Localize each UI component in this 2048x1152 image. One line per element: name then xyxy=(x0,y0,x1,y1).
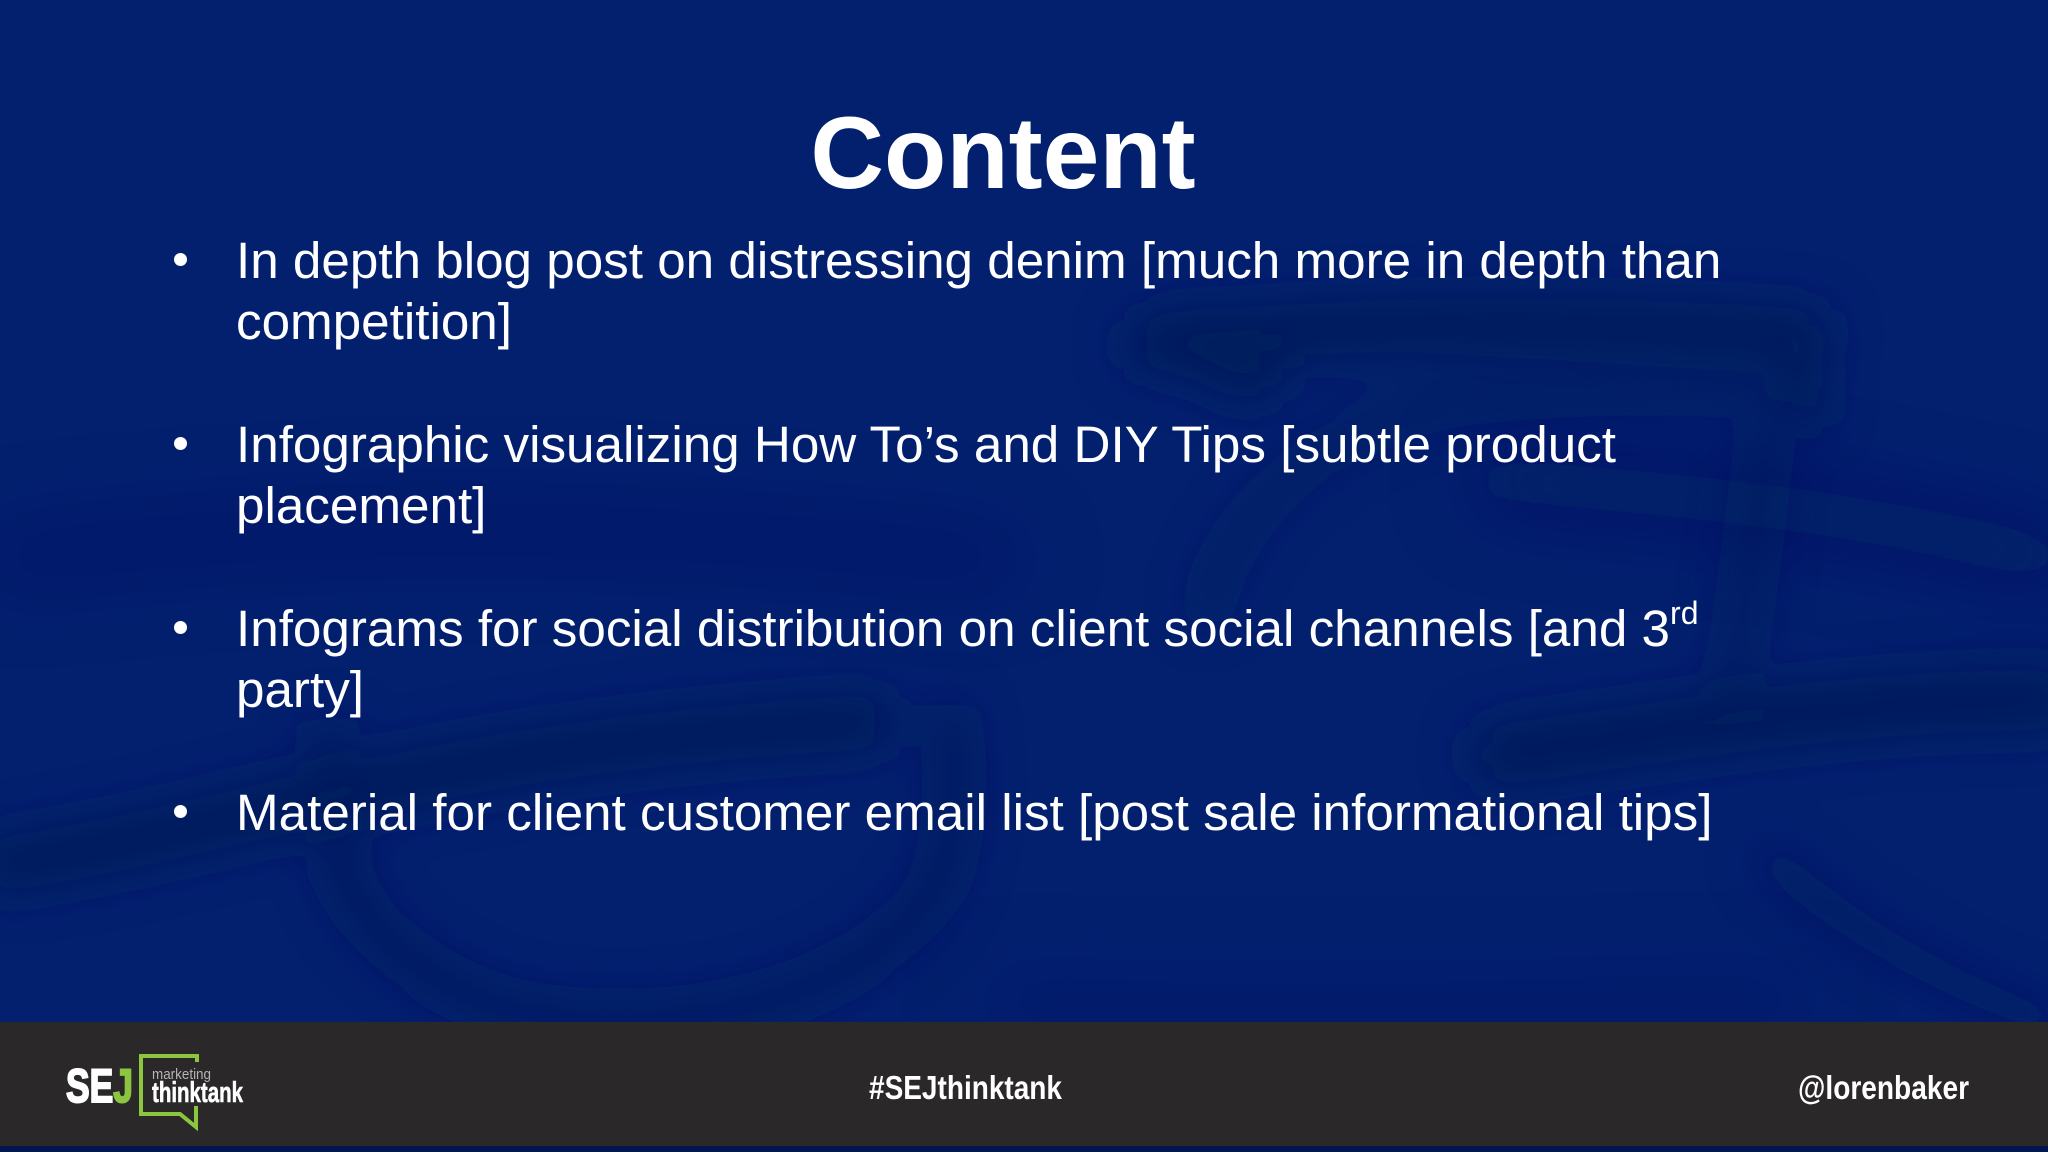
logo SEJ wordmark: SEJ xyxy=(66,1059,133,1112)
logo speech bubble xyxy=(141,1056,197,1127)
bullet 1: In depth blog post on distressing denim [much more in depth than xyxy=(236,232,1721,289)
bullet 3: party] xyxy=(236,661,364,718)
bullet 3 xyxy=(174,595,1698,718)
logo marketing text: marketing xyxy=(152,1066,211,1083)
footer bar xyxy=(0,1022,2048,1146)
bullet 2 xyxy=(174,416,1616,534)
bullet 1 xyxy=(174,232,1721,350)
bullet 1: competition] xyxy=(236,293,512,350)
bullet 4: Material for client customer email list [post sale informational tips] xyxy=(236,784,1712,841)
bullet 2: Infographic visualizing How To’s and DIY Tips [subtle product xyxy=(236,416,1616,473)
title: Content xyxy=(810,96,1196,210)
bullet 2: placement] xyxy=(236,477,486,534)
logo: SEJ marketing thinktank xyxy=(66,1054,244,1132)
bottom edge strip xyxy=(0,1146,2048,1152)
bullet 3: Infograms for social distribution on client social channels [and 3rd xyxy=(236,595,1698,657)
